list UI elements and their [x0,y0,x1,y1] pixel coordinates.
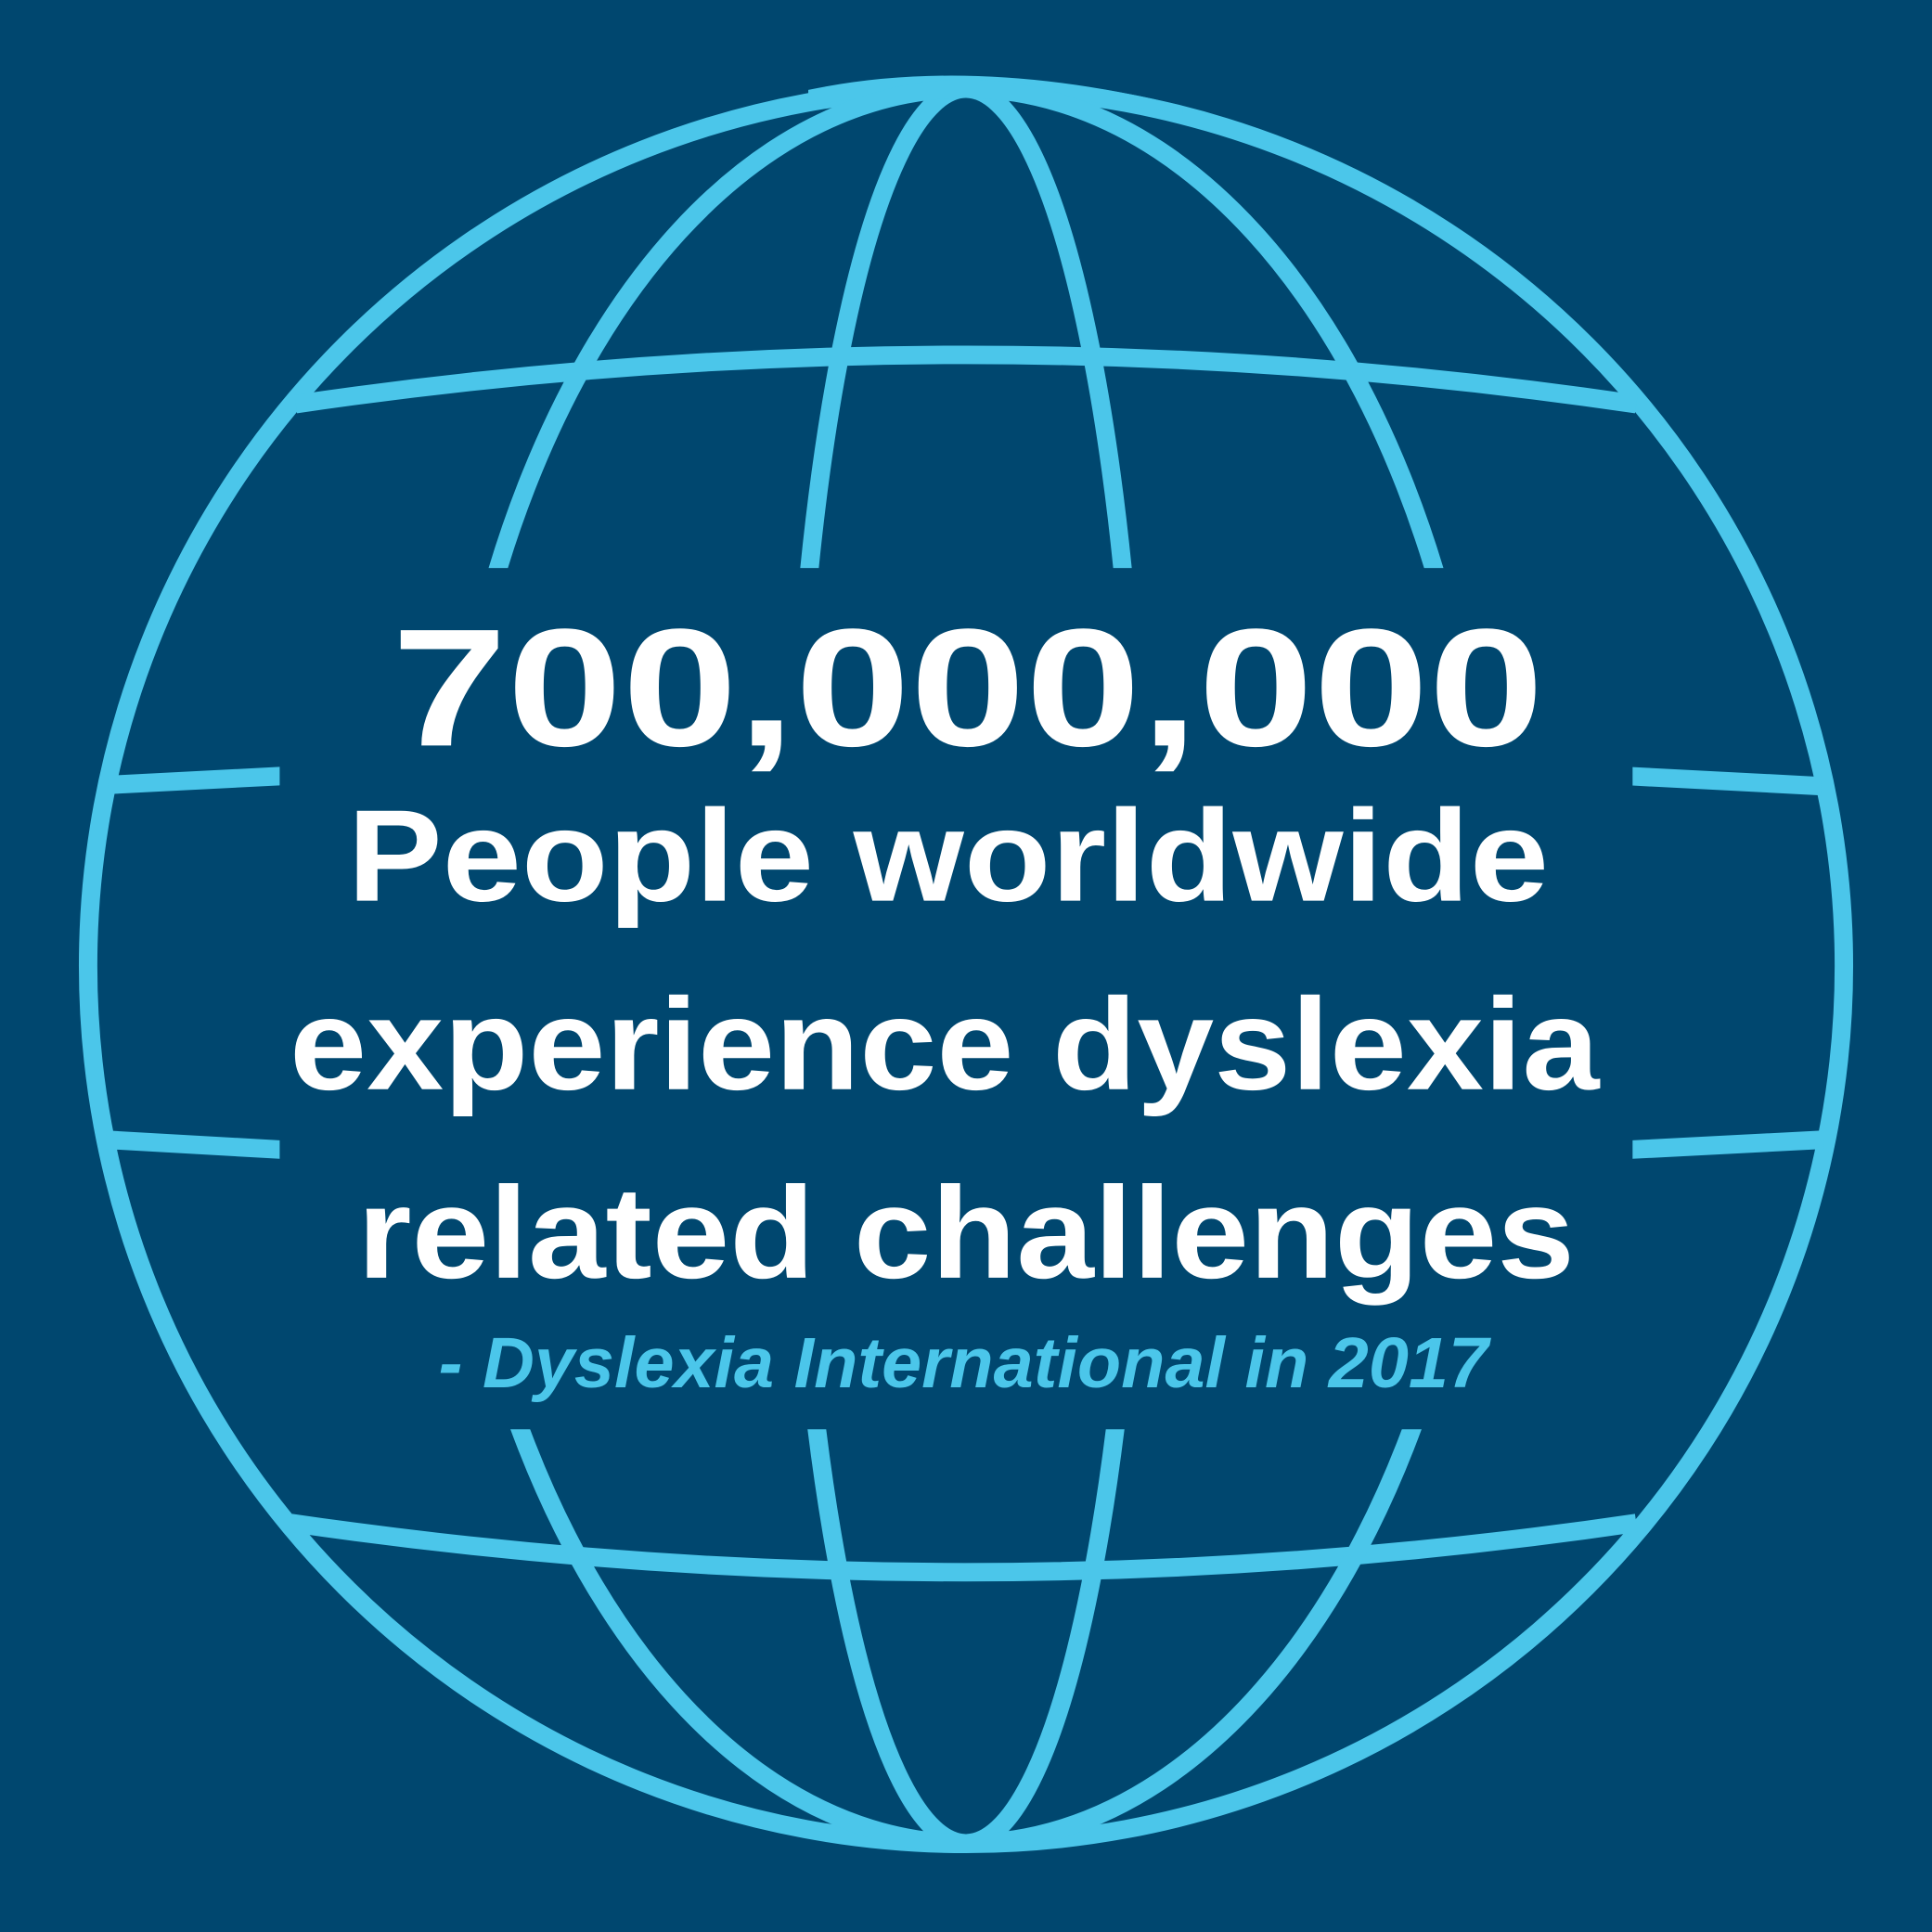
inner meridian [791,89,1141,1843]
statement line 1: People worldwide [347,783,1549,929]
source attribution: - Dyslexia International in 2017 [439,1323,1491,1403]
top edge thickening [808,76,1177,104]
statement line 3: related challenges [357,1160,1575,1306]
upper left parallel stub [109,775,302,785]
top parallel [296,354,1636,405]
lower left parallel stub [106,1140,302,1151]
statement line 2: experience dyslexia [290,972,1601,1117]
outer meridian [441,89,1491,1843]
lower right parallel stub [1608,1140,1823,1151]
headline number: 700,000,000 [392,595,1544,781]
upper right parallel stub [1608,775,1821,786]
statement text [290,783,1601,1306]
bottom parallel [290,1523,1636,1572]
